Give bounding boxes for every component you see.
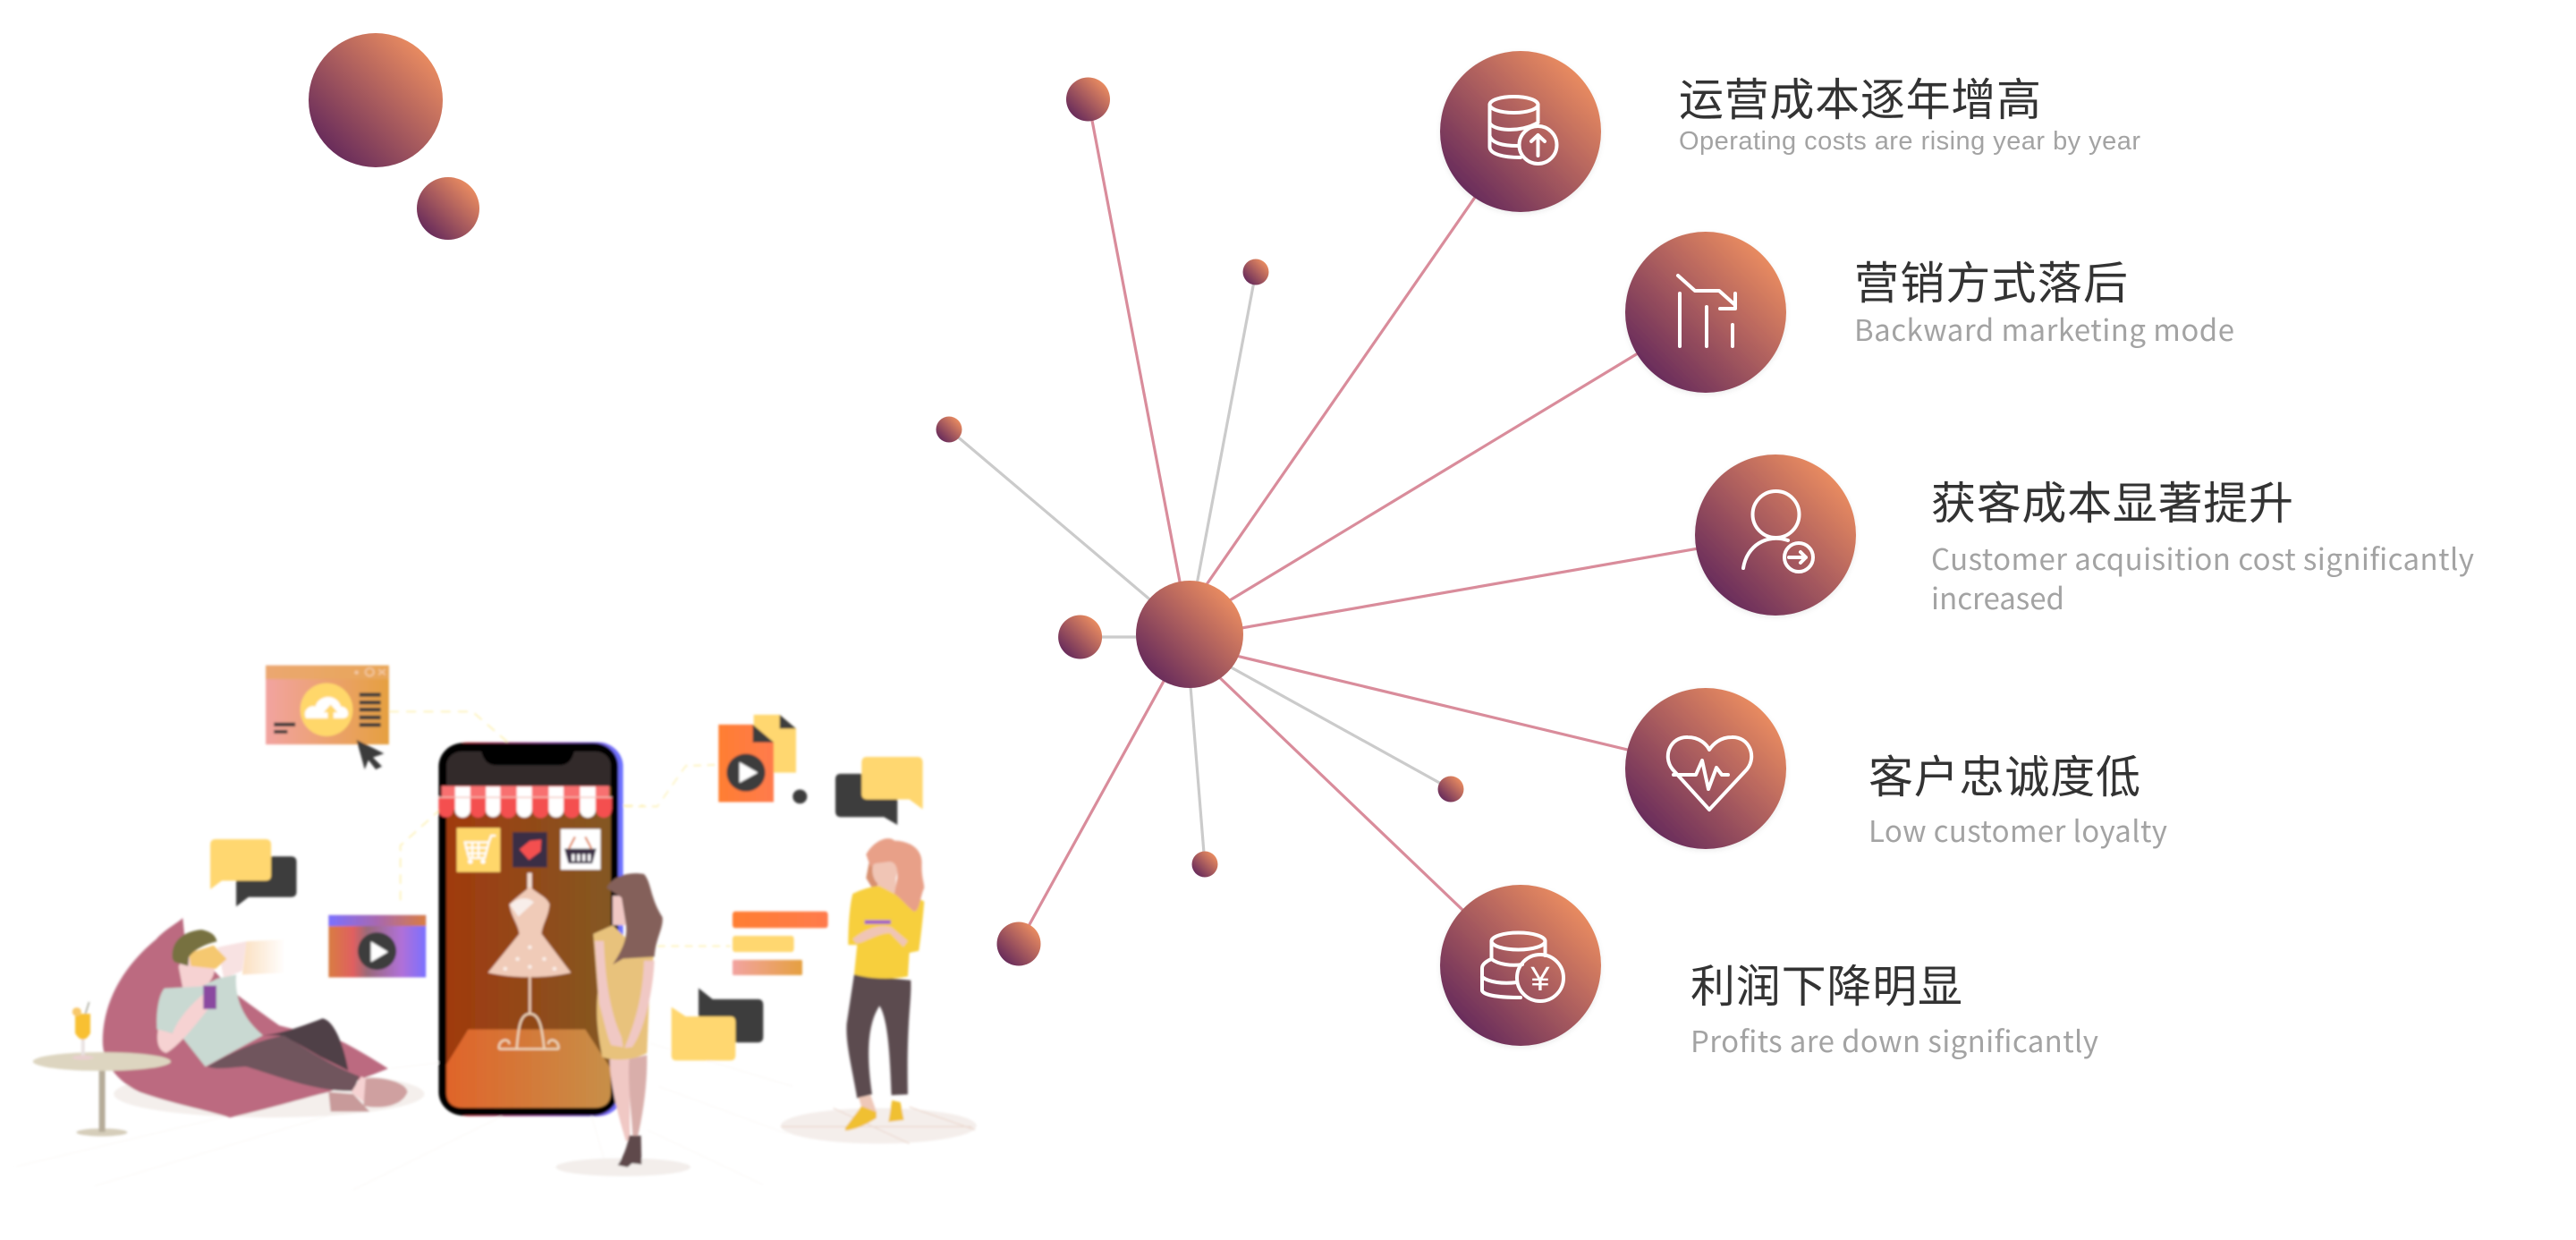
decorative circles top left xyxy=(309,33,479,240)
icon: declining bars xyxy=(1625,232,1786,393)
table with drink xyxy=(33,1002,171,1136)
subtitle: Profits are down significantly xyxy=(1690,1018,2098,1061)
ground shadow xyxy=(114,1071,424,1117)
beanbag xyxy=(103,918,388,1117)
item 5: falling profits xyxy=(1440,885,2098,1061)
ground shadows xyxy=(555,1107,977,1176)
heading: 营销方式落后 xyxy=(1854,259,2128,309)
dot xyxy=(792,789,807,803)
upload window xyxy=(266,666,389,744)
floor lines xyxy=(647,1043,793,1185)
dress on mannequin xyxy=(488,873,571,1049)
connector dashes xyxy=(389,711,644,900)
subtitle: Customer acquisition cost significantly xyxy=(1931,536,2474,579)
video documents xyxy=(718,715,796,803)
woman in dress xyxy=(593,873,663,1168)
chat bubbles xyxy=(210,839,297,906)
connector dashes xyxy=(624,765,731,946)
radial connector lines xyxy=(949,99,1775,965)
subtitle: Low customer loyalty xyxy=(1868,808,2167,851)
shop icons xyxy=(457,828,600,872)
icon: heart with pulse xyxy=(1625,688,1786,849)
item 1: rising operating costs xyxy=(1440,51,2140,212)
hub and satellite nodes xyxy=(936,77,1463,966)
phone storefront xyxy=(438,743,623,1117)
floor lines xyxy=(16,1041,616,1190)
heading: 客户忠诚度低 xyxy=(1868,752,2140,803)
illustration: online shopping scene xyxy=(16,666,977,1190)
woman with phone xyxy=(845,838,924,1131)
right part of scene: woman, documents, bubbles xyxy=(555,715,977,1185)
chat bubbles upper xyxy=(835,757,923,825)
heading: 利润下降明显 xyxy=(1690,962,1962,1012)
left part of scene: man, table, phone xyxy=(16,666,644,1190)
icon: coins with yen xyxy=(1440,885,1601,1046)
subtitle: Operating costs are rising year by year xyxy=(1679,127,2140,156)
subtitle second line: increased xyxy=(1931,575,2064,618)
chat bubbles lower xyxy=(672,989,763,1060)
icon: coins with yen: ¥ xyxy=(1530,961,1550,998)
video window xyxy=(328,915,426,977)
cursor arrow xyxy=(357,740,384,769)
icon: user with arrow xyxy=(1695,454,1856,616)
icon: database with up arrow xyxy=(1440,51,1601,212)
heading: 获客成本显著提升 xyxy=(1931,479,2293,529)
item 3: customer acquisition cost xyxy=(1695,454,2474,618)
item 2: outdated marketing xyxy=(1625,232,2234,393)
awning xyxy=(438,786,612,818)
text bars xyxy=(733,912,828,975)
heading: 运营成本逐年增高 xyxy=(1679,75,2041,125)
subtitle: Backward marketing mode xyxy=(1854,307,2234,350)
man xyxy=(157,930,408,1111)
item 4: low loyalty xyxy=(1625,688,2167,851)
